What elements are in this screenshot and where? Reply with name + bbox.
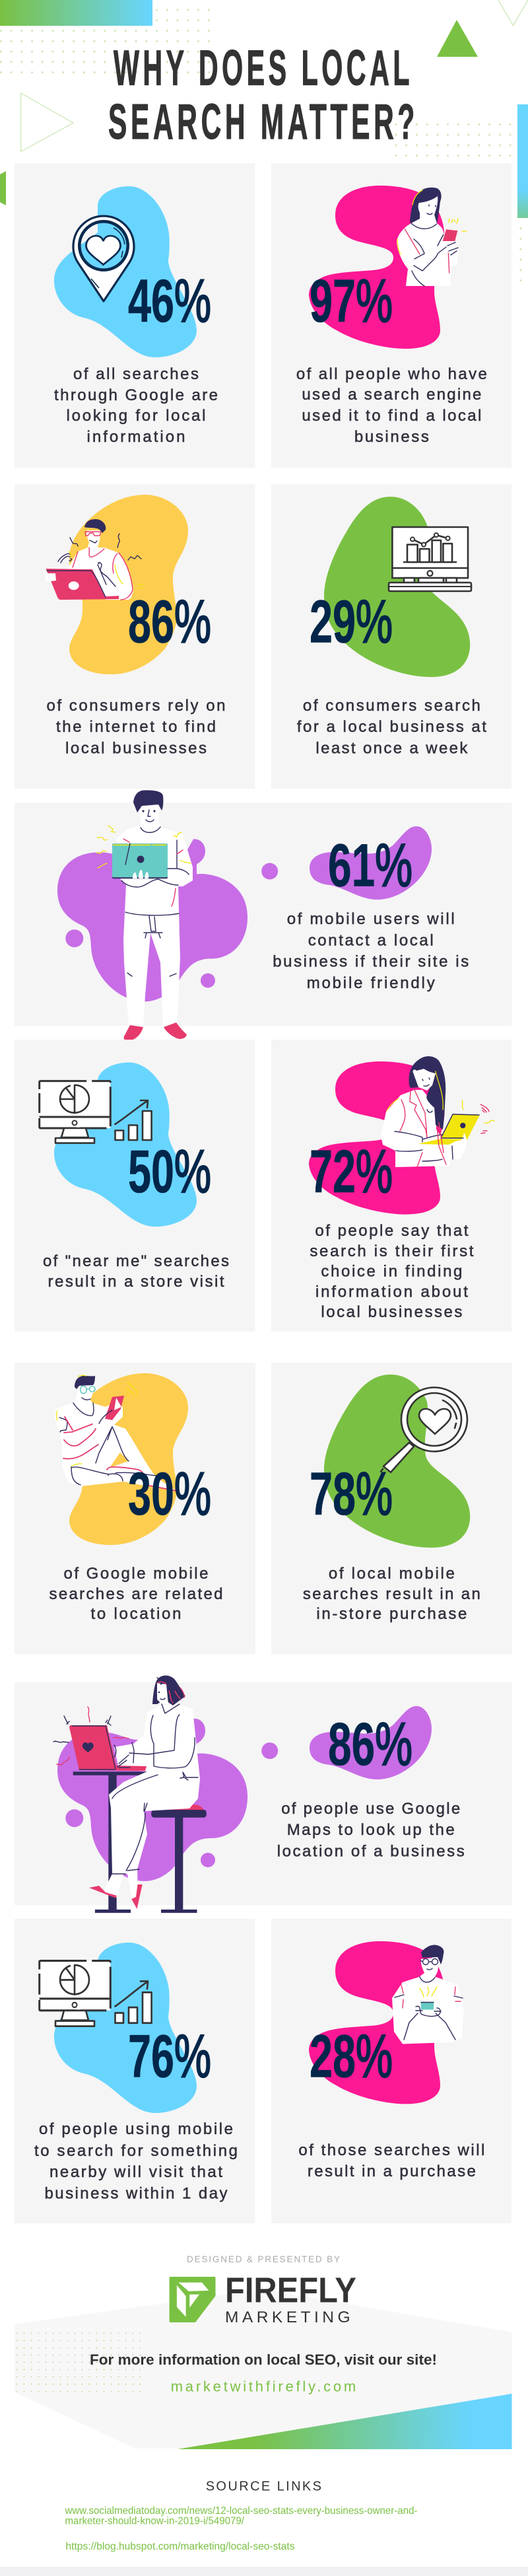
description — [310, 1222, 474, 1321]
description: searches are related — [49, 1585, 223, 1603]
logo: FIREFLY — [225, 2271, 356, 2310]
panel: 78% — [271, 1363, 512, 1655]
panel: 72%: 72% — [310, 1138, 393, 1205]
description: business within 1 day — [45, 2185, 227, 2203]
header decorations — [0, 0, 528, 284]
icon: map pin with heart — [73, 216, 134, 301]
description: local businesses — [321, 1303, 462, 1321]
description: business — [354, 428, 429, 446]
description: used a search engine — [302, 386, 481, 404]
description: of mobile users will — [287, 910, 455, 928]
logo: MARKETING — [225, 2308, 350, 2326]
description — [297, 697, 486, 757]
description — [273, 910, 469, 992]
description: of consumers rely on — [46, 697, 226, 715]
description: of people say that — [315, 1222, 469, 1240]
description: looking for local — [66, 407, 206, 425]
description: for a local business at — [297, 718, 486, 736]
description: used it to find a local — [302, 407, 481, 425]
description: to search for something — [34, 2142, 238, 2160]
bottom strip — [0, 2567, 528, 2576]
icon: monitor with growth chart — [40, 1961, 152, 2026]
description: of all searches — [73, 365, 199, 383]
illustration: woman with phone — [397, 188, 467, 286]
description: in-store purchase — [316, 1605, 467, 1623]
blob behind percent — [310, 1706, 432, 1779]
panel: 97% — [271, 163, 512, 468]
description: of Google mobile — [63, 1565, 209, 1583]
blob behind percent — [310, 826, 432, 900]
icon: desktop with bar chart — [389, 527, 471, 591]
description: business if their site is — [273, 953, 469, 971]
icon: monitor with growth chart — [40, 1081, 152, 1143]
description: information about — [315, 1283, 468, 1301]
purple blob — [57, 1719, 248, 1881]
logo — [170, 2271, 356, 2326]
panel: 28% — [271, 1919, 512, 2223]
presented by: DESIGNED & PRESENTED BY — [187, 2254, 340, 2264]
illustration: man sitting with phone — [55, 1375, 176, 1491]
description — [298, 2141, 484, 2180]
description: of local mobile — [329, 1565, 455, 1583]
description: to location — [91, 1605, 181, 1623]
illustration: man with teal phone — [392, 1945, 464, 2044]
panel: 76% — [15, 1919, 255, 2223]
panel: 86% Google Maps — [15, 1676, 512, 1913]
description: of those searches will — [298, 2141, 484, 2159]
panel: 50%: 50% — [128, 1138, 211, 1205]
description: of people use Google — [281, 1800, 460, 1818]
panel: 29% — [271, 484, 512, 789]
panel: 97%: 97% — [310, 268, 393, 335]
description: search is their first — [310, 1242, 474, 1260]
illustration: woman at table — [53, 1676, 207, 1913]
panel: 46%: 46% — [128, 268, 211, 335]
footer panel — [15, 2254, 512, 2449]
description: result in a purchase — [308, 2163, 476, 2180]
description — [43, 1252, 229, 1291]
description — [54, 365, 218, 446]
description — [46, 697, 226, 757]
description: through Google are — [54, 386, 218, 404]
panel: 61%: 61% — [328, 832, 412, 900]
panel: 86% consumers: 86% — [128, 588, 211, 655]
description — [49, 1565, 223, 1623]
description: local businesses — [65, 740, 207, 757]
source links: marketer-should-know-in-2019-i/549079/ — [65, 2516, 245, 2527]
illustration: woman with yellow laptop — [381, 1056, 494, 1167]
call to action: For more information on local SEO, visit our site! — [90, 2351, 437, 2368]
source links — [65, 2480, 417, 2552]
purple blob — [57, 839, 248, 1001]
description — [296, 365, 487, 446]
description: nearby will visit that — [50, 2163, 222, 2181]
description: contact a local — [308, 931, 434, 950]
panel: 61% — [15, 790, 512, 1041]
icon: magnifying glass with heart — [381, 1387, 467, 1472]
description: searches result in an — [303, 1585, 480, 1603]
description — [34, 2120, 238, 2203]
purple dots — [65, 863, 278, 988]
description: of all people who have — [296, 365, 487, 383]
description — [277, 1800, 465, 1860]
description: information — [87, 428, 185, 446]
description: of people using mobile — [39, 2120, 233, 2138]
title — [108, 40, 418, 149]
description — [303, 1565, 480, 1623]
panel: 29%: 29% — [310, 588, 393, 655]
site url: marketwithfirefly.com — [171, 2378, 356, 2394]
description: of "near me" searches — [43, 1252, 229, 1270]
panel: 30% — [15, 1363, 255, 1655]
panel: 78%: 78% — [310, 1460, 393, 1528]
description: least once a week — [315, 740, 468, 757]
panel: 86% consumers — [15, 484, 255, 789]
source links: www.socialmediatoday.com/news/12-local-seo-stats-every-business-owner-and- — [65, 2505, 417, 2517]
panel: 72% — [271, 1040, 512, 1332]
panel: 86% Google Maps: 86% — [328, 1711, 412, 1778]
description: result in a store visit — [48, 1273, 224, 1291]
description: Maps to look up the — [287, 1821, 455, 1839]
panel: 46% — [15, 163, 255, 468]
description: choice in finding — [321, 1263, 462, 1281]
panel: 76%: 76% — [128, 2022, 211, 2090]
description: the internet to find — [56, 718, 216, 736]
illustration: man with laptop — [45, 519, 143, 600]
description: mobile friendly — [307, 974, 435, 992]
source links: https://blog.hubspot.com/marketing/local-seo-stats — [66, 2541, 294, 2552]
description: of consumers search — [303, 697, 480, 715]
panel: 28%: 28% — [310, 2022, 393, 2090]
illustration: man holding laptop — [96, 790, 193, 1041]
panel: 50% — [15, 1040, 255, 1332]
purple dots — [65, 1742, 278, 1867]
panel: 30%: 30% — [128, 1460, 211, 1528]
description: location of a business — [277, 1843, 465, 1860]
source links: SOURCE LINKS — [206, 2480, 321, 2494]
